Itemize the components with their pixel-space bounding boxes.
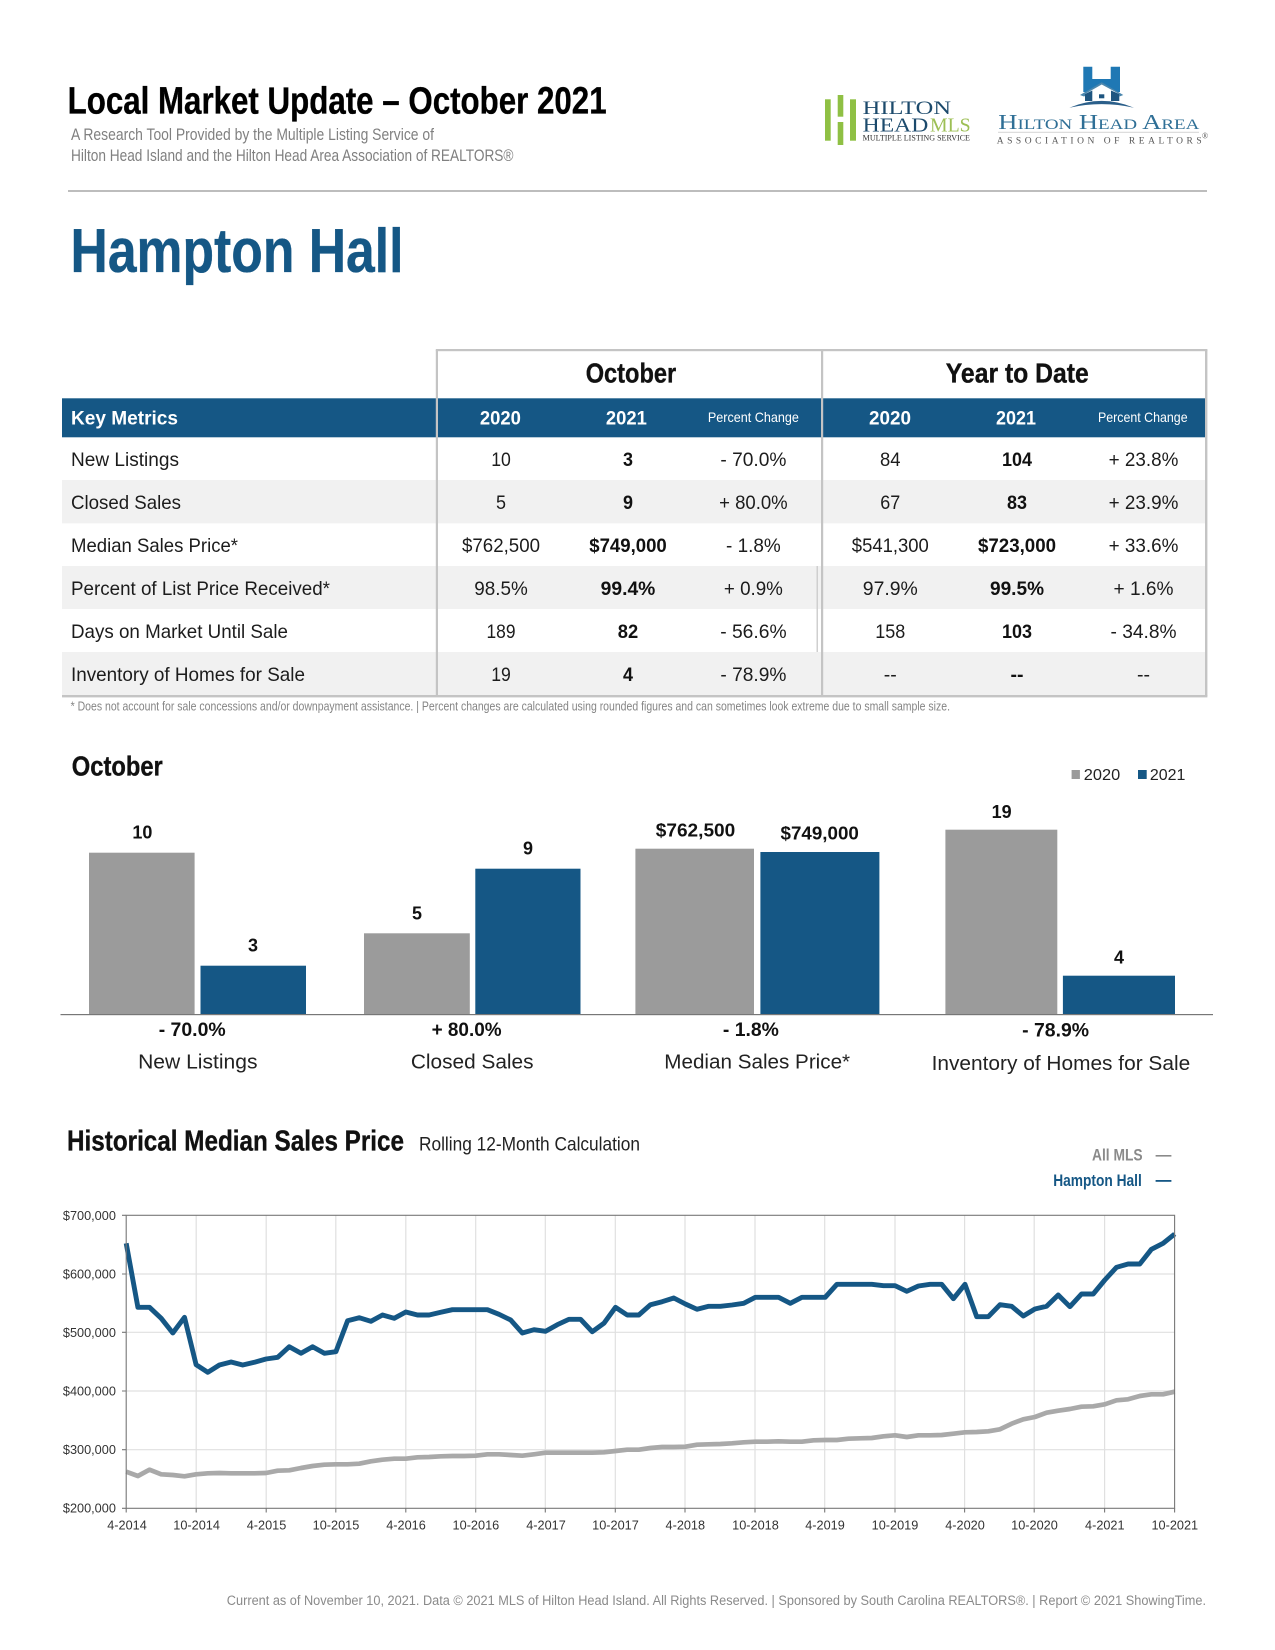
bars: Inventory of Homes for Sale: 19 — [992, 801, 1012, 822]
chart heading — [67, 1125, 640, 1157]
row: Median Sales Price — [71, 535, 1178, 557]
logo: Hilton Head MLS: HEAD — [863, 116, 928, 137]
bars: Median Sales Price — [635, 820, 879, 1074]
row: Inventory of Homes for Sale: 4 — [623, 664, 633, 686]
row: Inventory of Homes for Sale: -- — [1137, 664, 1150, 686]
logo house windows — [1085, 90, 1119, 101]
bars: New Listings: New Listings — [138, 1052, 258, 1074]
row: New Listings: + 23.8% — [1109, 449, 1178, 471]
bars: Median Sales Price: $749,000 — [781, 823, 859, 844]
panel: historical median sales price line chart — [63, 1125, 1198, 1532]
x-axis labels: 10-2017 — [592, 1517, 639, 1532]
subtitle: Hilton Head Island and the Hilton Head Area Association of REALTORS® — [71, 147, 514, 165]
row: Closed Sales: 83 — [1007, 492, 1027, 514]
legend — [1072, 767, 1186, 784]
bars: Closed Sales: 9 — [523, 837, 533, 858]
y-axis labels: $500,000 — [63, 1325, 116, 1340]
row: Median Sales Price: - 1.8% — [726, 535, 781, 557]
bars: Inventory of Homes for Sale: 4 — [1114, 947, 1125, 968]
series: Hampton Hall line — [126, 1234, 1175, 1372]
bars: New Listings: 10 — [132, 822, 152, 843]
heading: Hampton Hall: Hampton Hall — [70, 217, 404, 286]
row: Median Sales Price: $749,000 — [589, 535, 667, 557]
chart heading: Rolling 12-Month Calculation — [419, 1133, 640, 1155]
y-axis labels: $400,000 — [63, 1383, 116, 1398]
y-axis labels: $600,000 — [63, 1266, 116, 1281]
bars: Closed Sales: + 80.0% — [432, 1019, 502, 1041]
bars: Inventory of Homes for Sale: Inventory of Homes for Sale — [932, 1053, 1190, 1075]
panel: October bar chart — [60, 751, 1213, 1075]
row: Inventory of Homes for Sale — [71, 664, 1150, 686]
row: Closed Sales — [71, 492, 1178, 514]
row: Days on Market Until Sale: 158 — [875, 621, 905, 643]
period headings — [586, 358, 1089, 389]
row: Median Sales Price: + 33.6% — [1109, 535, 1178, 557]
row: Median Sales Price: $723,000 — [978, 535, 1056, 557]
bars: New Listings: 3 — [248, 934, 258, 955]
bars: Median Sales Price: $762,500 — [656, 820, 735, 841]
row: New Listings: 84 — [880, 449, 901, 471]
row: Inventory of Homes for Sale: 19 — [491, 664, 511, 686]
row: New Listings — [71, 449, 1178, 471]
column headers: Percent Change — [1098, 409, 1188, 425]
subtitle — [71, 126, 514, 165]
row: Percent of List Price Received: + 1.6% — [1114, 578, 1174, 600]
title: Local Market Update – October 2021 — [68, 81, 607, 123]
chart heading: October — [72, 751, 163, 782]
x-axis labels: 4-2014 — [107, 1517, 147, 1532]
x-axis labels: 4-2020 — [945, 1517, 985, 1532]
column headers: 2021 — [996, 408, 1036, 430]
x-axis labels: 10-2019 — [872, 1517, 918, 1532]
x-axis labels: 4-2017 — [526, 1517, 566, 1532]
row: Closed Sales: 67 — [880, 492, 900, 514]
logo: Hilton Head Area Association of Realtors: ASSOCIATION OF REALTORS — [997, 136, 1202, 146]
row: Inventory of Homes for Sale: -- — [884, 664, 897, 686]
row: Days on Market Until Sale: - 56.6% — [720, 621, 787, 643]
x-axis labels: 4-2019 — [805, 1517, 845, 1532]
row: Closed Sales: 9 — [623, 492, 633, 514]
series: All MLS line — [126, 1392, 1175, 1476]
chart heading: Historical Median Sales Price — [67, 1125, 404, 1157]
header: report title block — [68, 81, 607, 165]
row: Days on Market Until Sale: Days on Market Until Sale — [71, 621, 288, 643]
column headers — [71, 408, 1188, 430]
footnote: * Does not account for sale concessions and/or downpayment assistance. | Percent changes are calculated using rounded figures and can sometimes look extreme due to small sample size. — [71, 700, 950, 714]
column headers: Percent Change — [708, 409, 799, 425]
row: Days on Market Until Sale: - 34.8% — [1110, 621, 1176, 643]
x-axis labels: 4-2016 — [386, 1517, 426, 1532]
y-axis labels: $200,000 — [63, 1501, 116, 1516]
row: New Listings: 3 — [623, 449, 633, 471]
row: New Listings: 104 — [1002, 449, 1032, 471]
column headers: Key Metrics — [71, 408, 178, 430]
x-axis labels: 10-2018 — [732, 1517, 779, 1532]
line legend: All MLS — [1092, 1147, 1143, 1165]
row: Closed Sales: Closed Sales — [71, 492, 181, 514]
period headings: Year to Date — [946, 358, 1089, 389]
table header band — [62, 398, 1206, 437]
line legend: Hampton Hall — [1053, 1172, 1142, 1190]
bars: Median Sales Price: Median Sales Price* — [664, 1052, 850, 1074]
line legend — [1053, 1147, 1171, 1190]
y-axis labels — [63, 1208, 116, 1516]
bars: Inventory of Homes for Sale — [932, 801, 1190, 1075]
row: Percent of List Price Received: 97.9% — [863, 578, 918, 600]
logo: Hilton Head MLS: MLS — [930, 116, 971, 137]
bars: Inventory of Homes for Sale: - 78.9% — [1022, 1020, 1089, 1042]
row: Days on Market Until Sale: 103 — [1002, 621, 1032, 643]
panel: key metrics table — [62, 349, 1207, 697]
bars: Median Sales Price: - 1.8% — [723, 1019, 779, 1041]
row: Percent of List Price Received — [71, 578, 1174, 600]
period headings: October — [586, 358, 676, 389]
logo: Hilton Head Area Association of Realtors: ® — [1202, 132, 1208, 140]
logo: Hilton Head Area Association of Realtors: Hilton Head Area — [998, 110, 1199, 134]
row: Median Sales Price: $762,500 — [462, 535, 540, 557]
subtitle: A Research Tool Provided by the Multiple Listing Service of — [71, 126, 434, 144]
row: Inventory of Homes for Sale: Inventory of Homes for Sale — [71, 664, 305, 686]
footer: Current as of November 10, 2021. Data © 2021 MLS of Hilton Head Island. All Rights Reserved. | Sponsored by South Carolina REALTORS®. | Report © 2021 ShowingTime. — [227, 1593, 1206, 1608]
x-axis labels — [107, 1517, 1198, 1532]
bars: Closed Sales: 5 — [412, 902, 422, 923]
row: New Listings: New Listings — [71, 449, 179, 471]
bars: Closed Sales — [364, 837, 580, 1074]
logo: Hilton Head MLS: MULTIPLE LISTING SERVICE — [863, 134, 970, 143]
legend: 2020 — [1084, 767, 1120, 784]
row: Closed Sales: + 80.0% — [719, 492, 788, 514]
y-axis labels: $300,000 — [63, 1442, 116, 1457]
x-axis labels: 10-2015 — [313, 1517, 359, 1532]
row: Percent of List Price Received: 98.5% — [474, 578, 528, 600]
column headers: 2020 — [869, 408, 911, 430]
legend: 2021 — [1150, 767, 1186, 784]
row: Days on Market Until Sale: 82 — [618, 621, 638, 643]
column headers: 2021 — [606, 408, 647, 430]
row: Percent of List Price Received: 99.5% — [990, 578, 1044, 600]
row: Days on Market Until Sale — [71, 621, 1176, 643]
bars: New Listings — [89, 822, 306, 1074]
row: Median Sales Price: Median Sales Price* — [71, 535, 238, 557]
x-axis labels: 4-2018 — [666, 1517, 705, 1532]
row: Percent of List Price Received: Percent of List Price Received* — [71, 578, 330, 600]
row: Inventory of Homes for Sale: - 78.9% — [720, 664, 786, 686]
row: Percent of List Price Received: + 0.9% — [724, 578, 783, 600]
logo: Hilton Head Area Association of Realtors — [997, 67, 1208, 146]
x-axis labels: 10-2020 — [1011, 1517, 1058, 1532]
row: Days on Market Until Sale: 189 — [486, 621, 516, 643]
row: Inventory of Homes for Sale: -- — [1010, 664, 1024, 686]
row: New Listings: - 70.0% — [720, 449, 786, 471]
row: New Listings: 10 — [491, 449, 511, 471]
bars: Closed Sales: Closed Sales — [411, 1052, 534, 1074]
row: Closed Sales: 5 — [496, 492, 506, 514]
row: Percent of List Price Received: 99.4% — [601, 578, 655, 600]
row: Median Sales Price: $541,300 — [852, 535, 929, 557]
x-axis labels: 4-2021 — [1085, 1517, 1125, 1532]
x-axis labels: 10-2014 — [173, 1517, 220, 1532]
x-axis labels: 4-2015 — [247, 1517, 286, 1532]
x-axis labels: 10-2021 — [1151, 1517, 1198, 1532]
column headers: 2020 — [480, 408, 521, 430]
bars: New Listings: - 70.0% — [159, 1019, 226, 1041]
logo: Hilton Head MLS — [825, 95, 971, 145]
row: Closed Sales: + 23.9% — [1109, 492, 1178, 514]
y-axis labels: $700,000 — [63, 1208, 116, 1223]
x-axis labels: 10-2016 — [453, 1517, 499, 1532]
logo: Hilton Head MLS: HILTON — [863, 99, 951, 119]
